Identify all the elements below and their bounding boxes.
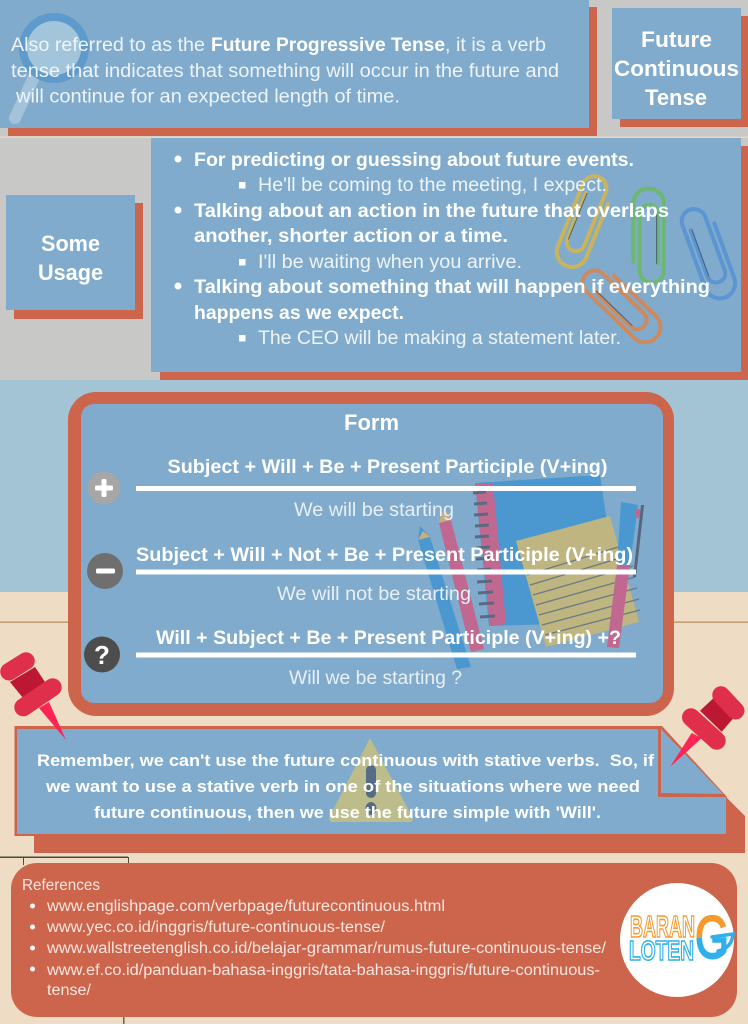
icon: question mark	[84, 636, 120, 672]
usage bullet 3: Talking about something that will happen if everything	[194, 277, 710, 298]
positive form: We will be starting	[294, 500, 454, 521]
icon: minus	[87, 553, 123, 589]
heading: title text: Continuous	[614, 56, 739, 81]
usage bullet 1: He'll be coming to the meeting, I expect.	[258, 175, 607, 196]
note text: we want to use a stative verb in one of the situations where we need	[45, 777, 640, 796]
icon: paper clips	[552, 173, 739, 349]
negative form	[136, 545, 636, 605]
callout: stative verbs note	[14, 726, 745, 853]
question form: Will + Subject + Be + Present Participle (V+ing) +?	[156, 628, 621, 649]
question form: Will we be starting ?	[289, 668, 462, 689]
references heading: References	[22, 877, 100, 894]
logo: Barang Loten	[620, 883, 734, 997]
usage bullet 2: another, shorter action or a time.	[194, 226, 508, 247]
references list	[30, 898, 607, 999]
definition text: Future Progressive Tense	[211, 35, 445, 56]
icon: magnifying glass	[15, 17, 85, 118]
icon: right push pin	[670, 695, 736, 767]
icon: notebook and pencils	[418, 475, 644, 669]
references list: www.englishpage.com/verbpage/futurecontinuous.html	[46, 898, 445, 915]
panel: title	[612, 8, 748, 127]
question form	[136, 628, 636, 689]
negative form: Subject + Will + Not + Be + Present Participle (V+ing)	[136, 545, 633, 566]
heading: title text	[614, 27, 739, 110]
positive form	[136, 457, 636, 521]
definition text: Also referred to as the	[11, 35, 205, 56]
references list: www.wallstreetenglish.co.id/belajar-grammar/rumus-future-continuous-tense/	[46, 940, 607, 957]
icon: question mark: ?	[94, 640, 110, 670]
usage bullet 1	[174, 150, 634, 196]
panel: form	[68, 392, 674, 716]
usage bullet 2	[174, 201, 669, 273]
panel: definition	[0, 0, 597, 136]
references list: tense/	[47, 982, 92, 999]
definition text: , it is a verb	[445, 35, 546, 56]
note text: Remember, we can't use the future continuous with stative verbs. So, if	[37, 751, 654, 770]
heading: form: Form	[344, 410, 399, 435]
references list: www.ef.co.id/panduan-bahasa-inggris/tata-bahasa-inggris/future-continuous-	[46, 962, 600, 979]
heading: some usage: Some	[41, 231, 100, 256]
icon: plus	[88, 472, 120, 504]
usage bullet 3	[174, 277, 710, 349]
heading: some usage	[38, 231, 103, 285]
definition text: tense that indicates that something will occur in the future and	[11, 61, 559, 82]
heading: title text: Future	[641, 27, 712, 52]
usage bullet 2: I'll be waiting when you arrive.	[258, 252, 522, 273]
panel: usage list	[151, 138, 748, 380]
usage bullet 3: The CEO will be making a statement later.	[258, 328, 621, 349]
panel: references	[11, 863, 737, 1017]
logo: Barang Loten: G	[695, 904, 729, 971]
panel: some usage label	[6, 195, 143, 319]
references list: www.yec.co.id/inggris/future-continuous-tense/	[46, 919, 386, 936]
note text: future continuous, then we use the future simple with 'Will'.	[94, 803, 601, 822]
usage bullet 3: happens as we expect.	[194, 303, 404, 324]
note text	[37, 751, 654, 822]
usage bullet 1: For predicting or guessing about future events.	[194, 150, 634, 171]
icon: left push pin	[9, 661, 66, 740]
negative form: We will not be starting	[277, 584, 471, 605]
definition text	[11, 35, 559, 108]
logo: Barang Loten: BARAN	[630, 909, 695, 944]
heading: title text: Tense	[645, 85, 707, 110]
heading: some usage: Usage	[38, 260, 103, 285]
positive form: Subject + Will + Be + Present Participle (V+ing)	[168, 457, 608, 478]
icon: warning triangle	[329, 738, 413, 822]
logo: Barang Loten: LOTEN	[629, 935, 694, 966]
definition text: will continue for an expected length of time.	[15, 86, 400, 108]
usage bullet 2: Talking about an action in the future that overlaps	[194, 201, 669, 222]
